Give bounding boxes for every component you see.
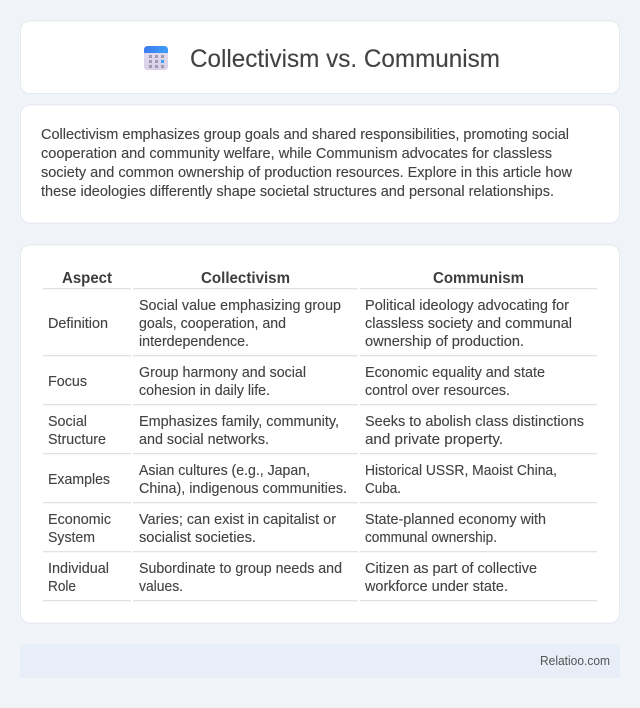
- row: social structure: and social networks.: [139, 432, 269, 448]
- row: individual role: values.: [139, 579, 183, 595]
- row: focus: [43, 365, 597, 405]
- footer bar: [20, 644, 620, 678]
- panel: comparison table: [20, 245, 620, 623]
- intro paragraph: Collectivism emphasizes group goals and shared responsibilities, promoting social: [41, 127, 569, 143]
- row: definition: ownership of production.: [365, 334, 524, 350]
- row: definition: classless society and communal: [365, 316, 572, 332]
- row: definition: Social value emphasizing group: [139, 298, 341, 314]
- row: social structure: Seeks to abolish class distinctions: [365, 414, 584, 430]
- row: definition: Definition: [48, 316, 108, 332]
- row: individual role: Citizen as part of collective: [365, 561, 537, 577]
- row: individual role: workforce under state.: [364, 579, 508, 595]
- row: social structure: and private property.: [365, 432, 503, 448]
- row: economic system: System: [48, 530, 95, 546]
- table header: Aspect: [62, 270, 112, 287]
- row: focus: Group harmony and social: [139, 365, 306, 381]
- row: examples: Asian cultures (e.g., Japan,: [139, 463, 310, 479]
- row: definition: Political ideology advocating for: [365, 298, 569, 314]
- row: economic system: Economic: [48, 512, 111, 528]
- intro paragraph: these ideologies differently shape societal structures and personal relationships.: [41, 184, 554, 200]
- row: examples: Historical USSR, Maoist China,: [365, 463, 557, 479]
- row: economic system: [43, 512, 597, 552]
- row: definition: interdependence.: [139, 334, 249, 350]
- row: social structure: Structure: [48, 432, 106, 448]
- panel: intro card: [20, 105, 620, 223]
- row: examples: [43, 463, 597, 503]
- row: economic system: State-planned economy with: [365, 512, 546, 528]
- row: social structure: Social: [48, 414, 87, 430]
- row: definition: goals, cooperation, and: [139, 316, 286, 332]
- row: individual role: [43, 561, 597, 601]
- row: individual role: Role: [48, 579, 76, 595]
- intro paragraph: society and common ownership of production resources. Explore in this article how: [41, 165, 573, 181]
- table header: [43, 270, 597, 289]
- panel: title card: [20, 21, 620, 94]
- title: Collectivism vs. Communism: [190, 45, 500, 73]
- row: examples: Cuba.: [365, 481, 401, 497]
- row: economic system: socialist societies.: [139, 530, 256, 546]
- row: individual role: Subordinate to group needs and: [139, 561, 342, 577]
- row: economic system: communal ownership.: [365, 530, 497, 546]
- table header: Collectivism: [201, 270, 290, 287]
- row: social structure: [43, 414, 597, 454]
- row: social structure: Emphasizes family, community,: [139, 414, 339, 430]
- intro paragraph: cooperation and community welfare, while Communism advocates for classless: [41, 146, 552, 162]
- row: focus: control over resources.: [365, 383, 510, 399]
- row: focus: Economic equality and state: [365, 365, 545, 381]
- intro paragraph: [41, 127, 573, 200]
- row: definition: [43, 298, 597, 356]
- row: focus: Focus: [48, 374, 87, 390]
- row: examples: Examples: [48, 472, 110, 488]
- icon: calendar: [144, 46, 168, 70]
- table header: Communism: [433, 270, 524, 287]
- row: individual role: Individual: [48, 561, 109, 577]
- row: economic system: Varies; can exist in capitalist or: [139, 512, 336, 528]
- row: focus: cohesion in daily life.: [139, 383, 270, 399]
- footer credit: Relatioo.com: [540, 654, 610, 668]
- row: examples: China), indigenous communities.: [139, 481, 347, 497]
